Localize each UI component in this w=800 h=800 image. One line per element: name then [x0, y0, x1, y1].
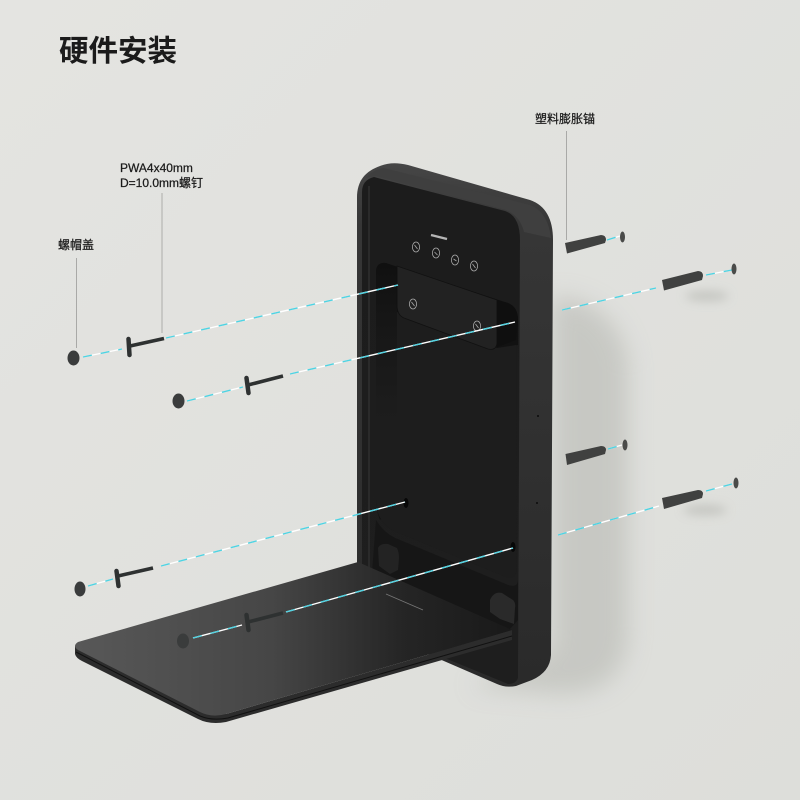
label: plastic anchor: 塑料膨胀锚 [535, 111, 595, 126]
left hinge [378, 544, 399, 574]
screw 3 [116, 568, 153, 586]
inner rim line [368, 186, 370, 570]
folding shelf [75, 562, 512, 723]
guide lines base [83, 236, 732, 638]
indicator slot [431, 235, 447, 239]
screw caps [68, 350, 189, 648]
touch icons [409, 242, 481, 331]
right hinge [490, 593, 515, 624]
lower inner ledge [370, 520, 518, 640]
label: screw: PWA4x40mm [120, 161, 193, 175]
screw 1 [128, 338, 164, 355]
plastic anchors [565, 235, 703, 509]
anchor wall shadows [683, 291, 729, 515]
body outer shell [357, 163, 553, 687]
recess cut-out [376, 263, 518, 520]
screw holes [404, 498, 516, 552]
wall shadow of device [470, 296, 628, 694]
leader lines [76, 131, 566, 348]
guide lines cyan dashes [83, 236, 732, 638]
lower recess panel [376, 300, 517, 578]
right recess gap [497, 300, 518, 347]
device front plate [397, 266, 497, 349]
screw 4 [246, 613, 283, 630]
shelf edge groove [76, 636, 512, 719]
front face [362, 177, 520, 684]
left recess strip [376, 263, 397, 420]
device body [357, 163, 553, 687]
screws [116, 338, 283, 630]
label: screw cap: 螺帽盖 [58, 237, 94, 252]
side pinholes [536, 415, 539, 504]
shelf edge [75, 630, 512, 723]
assembly guide lines [83, 236, 732, 638]
screw 2 [246, 376, 283, 393]
shelf top surface [75, 562, 512, 716]
anchor end caps [620, 232, 738, 488]
title: 硬件安装 [59, 35, 177, 68]
shelf logo [386, 594, 423, 610]
label: screw: D=10.0mm螺钉 [120, 176, 203, 190]
rim highlight top [366, 168, 551, 238]
